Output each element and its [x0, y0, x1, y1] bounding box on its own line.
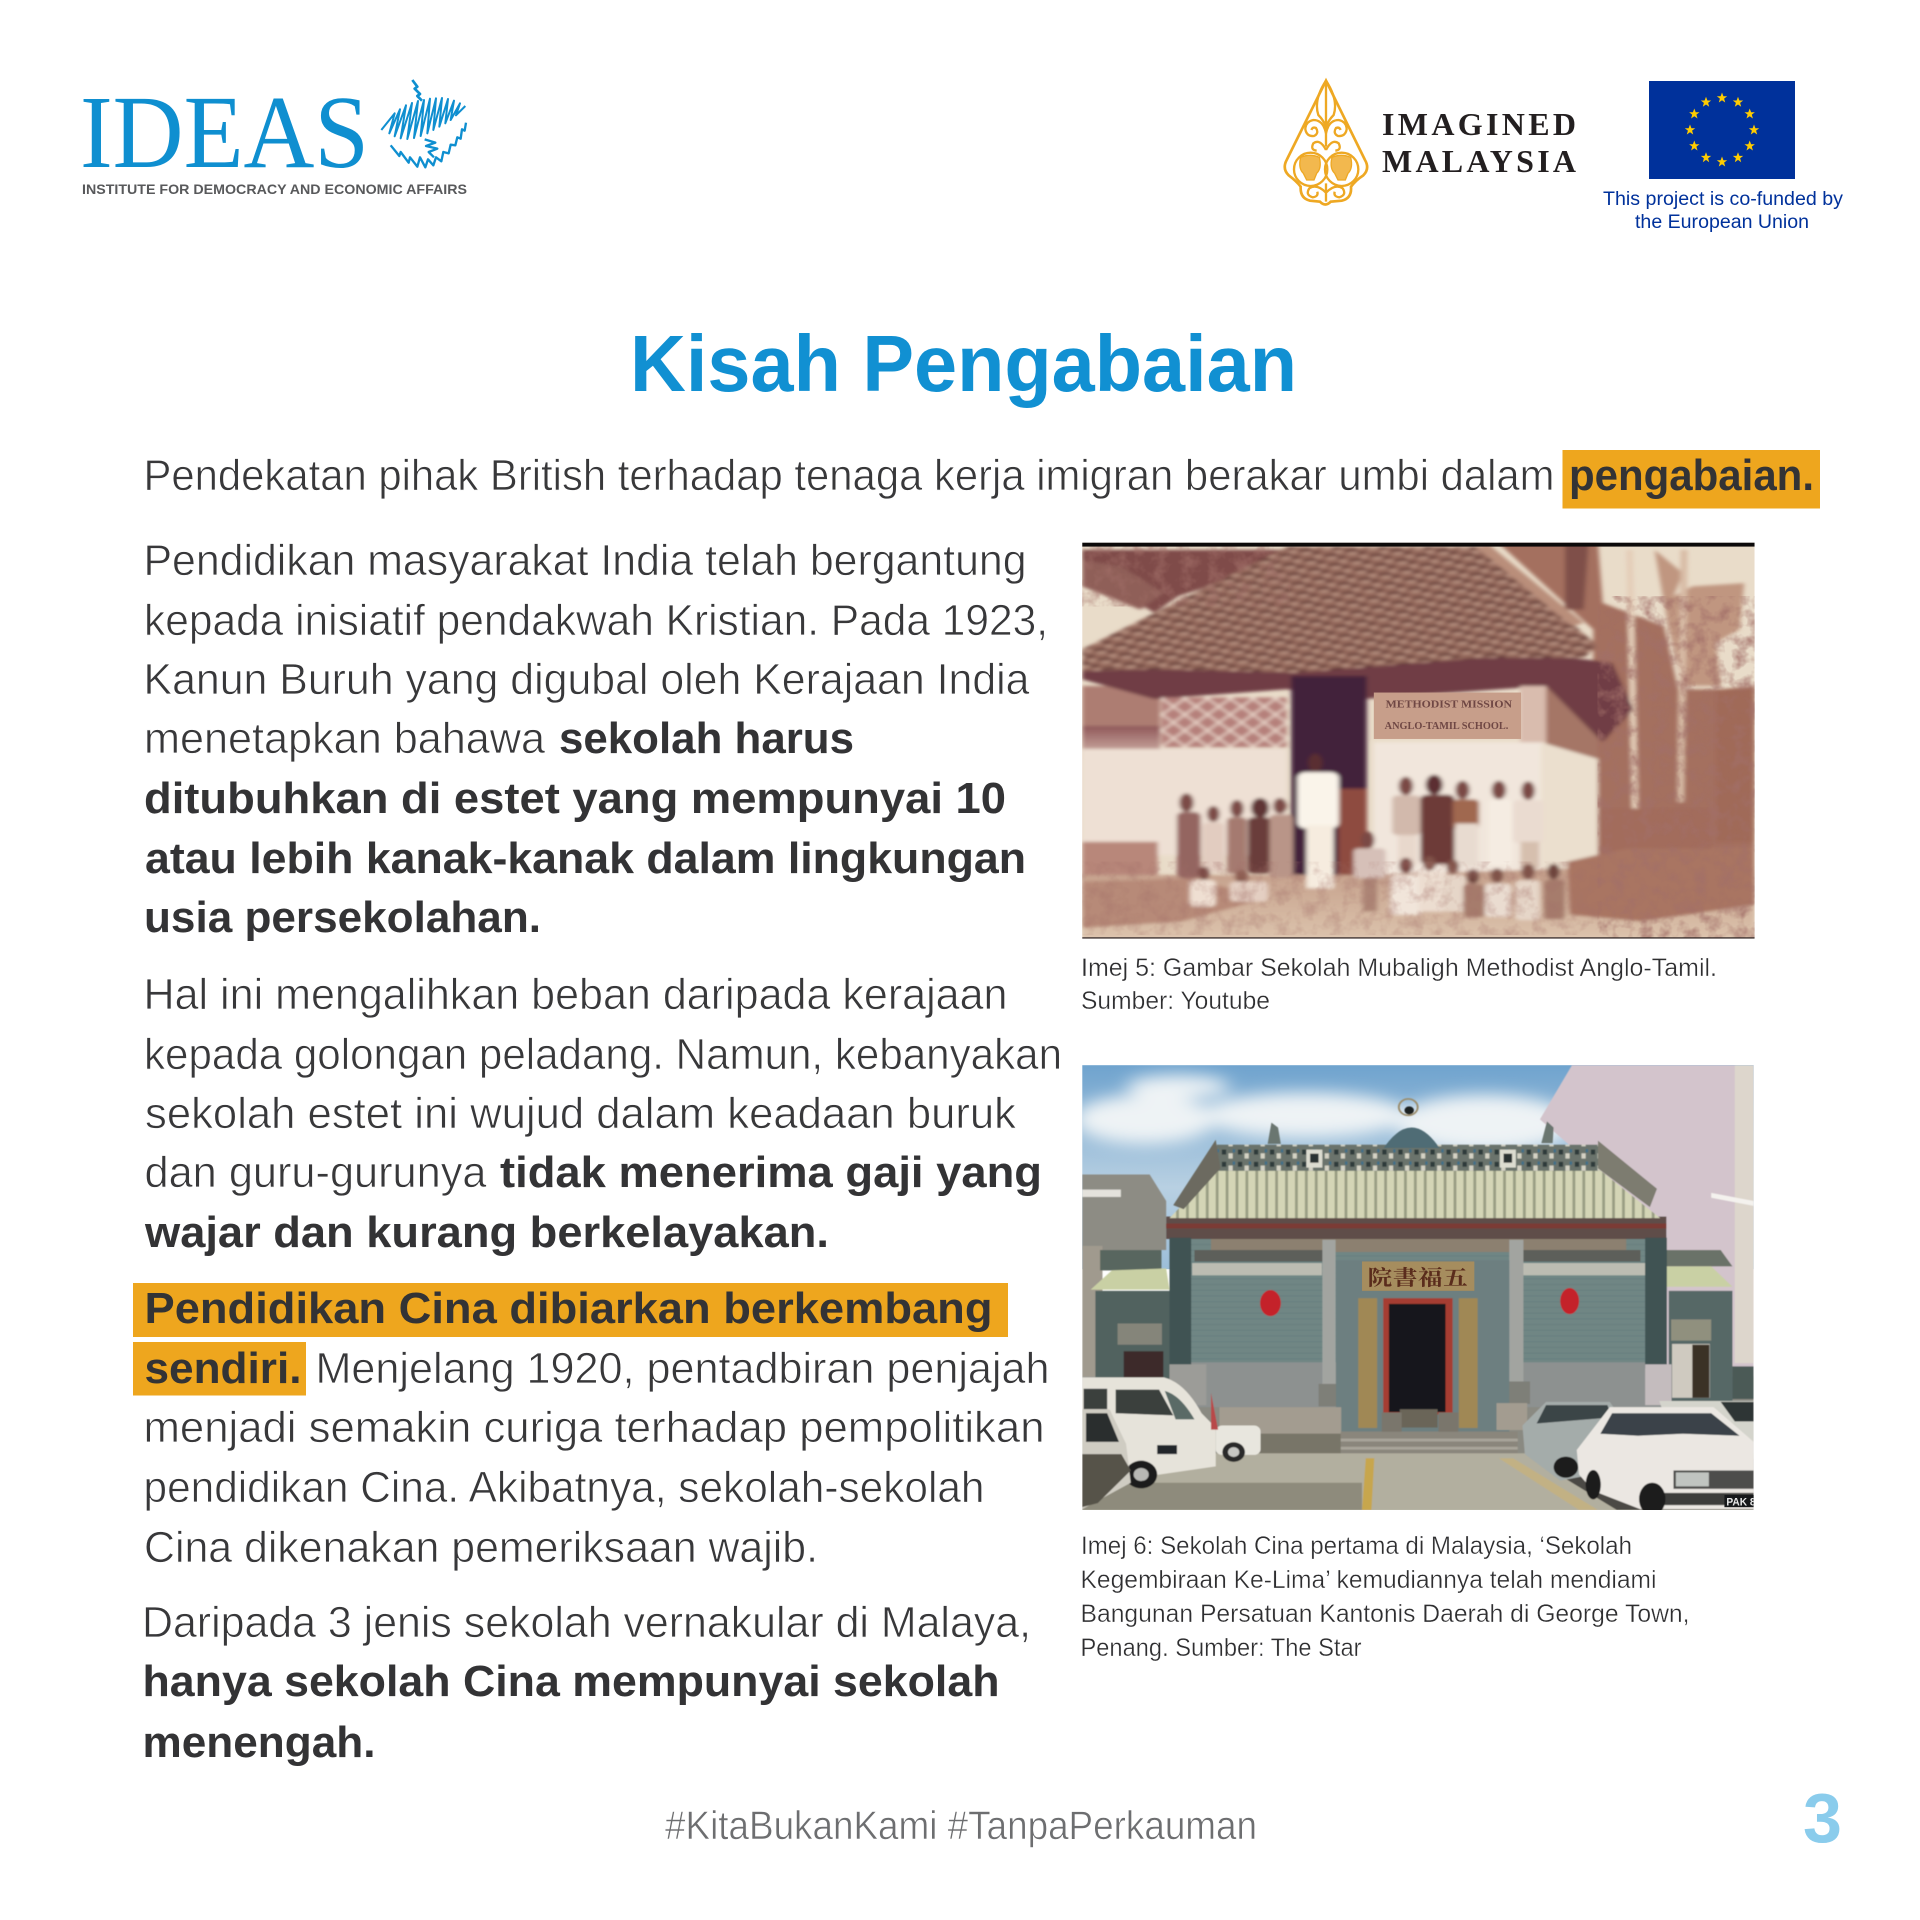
right white wall — [1374, 742, 1544, 875]
caption: image 6 — [1080, 1532, 1690, 1662]
left white wall — [1082, 749, 1287, 855]
foliage mottling: top left tree — [1082, 547, 1290, 606]
paragraph: Indian education: usia persekolahan. — [144, 893, 541, 942]
paragraph: Indian education — [144, 536, 1048, 942]
teacher in white — [1297, 754, 1339, 888]
paragraph: Indian education: ditubuhkan di estet yang mempunyai 10 — [144, 774, 1006, 823]
paragraph: Chinese education — [133, 1283, 1050, 1572]
IDEAS tagline: INSTITUTE FOR DEMOCRACY AND ECONOMIC AFFAIRS — [82, 181, 467, 197]
lattice panel — [1161, 698, 1287, 747]
parked cars left — [1082, 1377, 1261, 1509]
page number: 3 — [1803, 1779, 1842, 1857]
EU funding note: This project is co-funded by — [1603, 189, 1844, 210]
logo: IDEAS — [80, 75, 467, 197]
footer hashtags: #KitaBukanKami #TanpaPerkauman — [665, 1804, 1257, 1848]
tiled roof — [1169, 1170, 1660, 1218]
left wing — [1091, 1250, 1171, 1380]
main wall — [1190, 1238, 1646, 1363]
intro sentence: Pendekatan pihak British terhadap tenaga kerja imigran berakar umbi dalam — [144, 451, 1554, 500]
paragraph: Chinese education: Pendidikan Cina dibiarkan berkembang — [144, 1284, 992, 1333]
EU funding note: the European Union — [1635, 212, 1809, 233]
photo: Anglo-Tamil mission school — [1082, 543, 1755, 939]
roof ridge decoration — [1173, 1099, 1657, 1209]
caption: image 6: Bangunan Persatuan Kantonis Daerah di George Town, — [1080, 1600, 1690, 1628]
paragraph: Indian education: kepada inisiatif pendakwah Kristian. Pada 1923, — [144, 596, 1048, 645]
thatched roof — [1082, 547, 1598, 673]
paragraph: Indian education: Pendidikan masyarakat India telah bergantung — [144, 536, 1026, 585]
paragraph: Indian education: menetapkan bahawa — [144, 714, 546, 763]
paragraph: Chinese education: menjadi semakin curiga terhadap pempolitikan — [144, 1403, 1044, 1452]
doorway — [1291, 676, 1367, 882]
paragraph: Indian education: Kanun Buruh yang digubal oleh Kerajaan India — [144, 655, 1030, 704]
paragraph: estate schools: tidak menerima gaji yang — [500, 1148, 1042, 1197]
paragraph: vernacular schools: menengah. — [142, 1718, 376, 1767]
side wall upper — [1546, 679, 1598, 759]
highlight: line one — [133, 1283, 1008, 1337]
low side roof — [1082, 686, 1160, 726]
paragraph: Chinese education: Cina dikenakan pemeriksaan wajib. — [144, 1523, 818, 1572]
paragraph: estate schools: sekolah estet ini wujud dalam keadaan buruk — [145, 1089, 1017, 1138]
right neighbouring wall — [1540, 1065, 1754, 1389]
left neighbouring building — [1082, 1175, 1166, 1250]
clouds — [1074, 1075, 1574, 1152]
shrubs and fence — [1595, 846, 1626, 856]
caption: image 5: Sumber: Youtube — [1081, 987, 1270, 1015]
school sign — [1374, 693, 1521, 739]
intro sentence: pengabaian. — [1569, 451, 1814, 500]
foliage mottling: right side trees — [1598, 596, 1755, 938]
IDEAS wordmark: IDEAS — [80, 75, 369, 190]
side piers — [1169, 1238, 1191, 1368]
ground — [1082, 868, 1755, 938]
logo: Imagined Malaysia — [1285, 81, 1576, 204]
EU funding note — [1603, 189, 1844, 233]
eaves and beams — [1166, 1217, 1666, 1239]
paragraph: estate schools: dan guru-gurunya — [144, 1148, 487, 1197]
Imagined Malaysia wordmark: IMAGINED — [1382, 106, 1576, 142]
door surround — [1336, 1362, 1510, 1432]
standing children right — [1392, 775, 1543, 868]
caption: image 6: Imej 6: Sekolah Cina pertama di Malaysia, ‘Sekolah — [1081, 1532, 1632, 1560]
caption: image 5 — [1081, 954, 1717, 1015]
school name board: 院書福五 — [1368, 1261, 1468, 1292]
highlight: pengabaian — [1562, 450, 1820, 508]
title: Kisah Pengabaian — [630, 319, 1297, 408]
paragraph: Indian education: sekolah harus — [559, 714, 854, 763]
paragraph: vernacular schools: Daripada 3 jenis sekolah vernakular di Malaya, — [142, 1598, 1031, 1647]
highlight: line two — [133, 1342, 306, 1396]
logo: Imagined Malaysia: MALAYSIA — [1382, 143, 1576, 179]
school sign: METHODIST MISSION — [1386, 699, 1512, 710]
courtyard — [1082, 1453, 1754, 1510]
foliage mottling: foreground — [1082, 862, 1601, 935]
paragraph: Chinese education: Menjelang 1920, pentadbiran penjajah — [316, 1344, 1050, 1393]
caption: image 6: Penang. Sumber: The Star — [1080, 1634, 1362, 1662]
licence plate — [1724, 1495, 1756, 1508]
IDEAS bird icon — [381, 80, 466, 167]
paragraph: Indian education: atau lebih kanak-kanak dalam lingkungan — [145, 834, 1026, 883]
icon: gunungan ornament — [1285, 81, 1367, 204]
background trees — [1082, 543, 1755, 848]
upper wall column — [1520, 686, 1546, 742]
sky — [1082, 1065, 1754, 1269]
plinths and steps — [1220, 1407, 1341, 1434]
dark eaves — [1082, 653, 1633, 742]
paragraph: estate schools: Hal ini mengalihkan beban daripada kerajaan — [144, 970, 1008, 1019]
paragraph: estate schools: kepada golongan peladang. Namun, kebanyakan — [144, 1030, 1062, 1079]
lanterns — [1260, 1290, 1281, 1316]
seated children — [1190, 832, 1565, 920]
caption: image 6: Kegembiraan Ke-Lima’ kemudiannya telah mendiami — [1080, 1566, 1656, 1594]
paragraph: estate schools: wajar dan kurang berkelayakan. — [144, 1208, 829, 1257]
right wing — [1666, 1250, 1754, 1401]
paragraph: Chinese education: sendiri. — [144, 1344, 302, 1393]
school sign: ANGLO-TAMIL SCHOOL. — [1385, 720, 1508, 731]
parked cars right — [1522, 1401, 1754, 1515]
paragraph: vernacular schools: hanya sekolah Cina mempunyai sekolah — [142, 1657, 1000, 1706]
red door frame — [1383, 1298, 1453, 1415]
paragraph: estate schools — [144, 970, 1062, 1257]
base behind lower building — [1082, 1377, 1754, 1458]
paragraph: Chinese education: pendidikan Cina. Akibatnya, sekolah-sekolah — [144, 1463, 984, 1512]
standing children left — [1177, 793, 1293, 878]
columns — [1322, 1240, 1336, 1385]
licence plate: PAK 8 — [1726, 1497, 1756, 1508]
caption: image 5: Imej 5: Gambar Sekolah Mubaligh Methodist Anglo-Tamil. — [1081, 954, 1717, 982]
paragraph: vernacular schools — [142, 1598, 1031, 1767]
icon: EU flag — [1649, 81, 1795, 179]
photo: first Chinese school in Penang — [1074, 1065, 1756, 1515]
